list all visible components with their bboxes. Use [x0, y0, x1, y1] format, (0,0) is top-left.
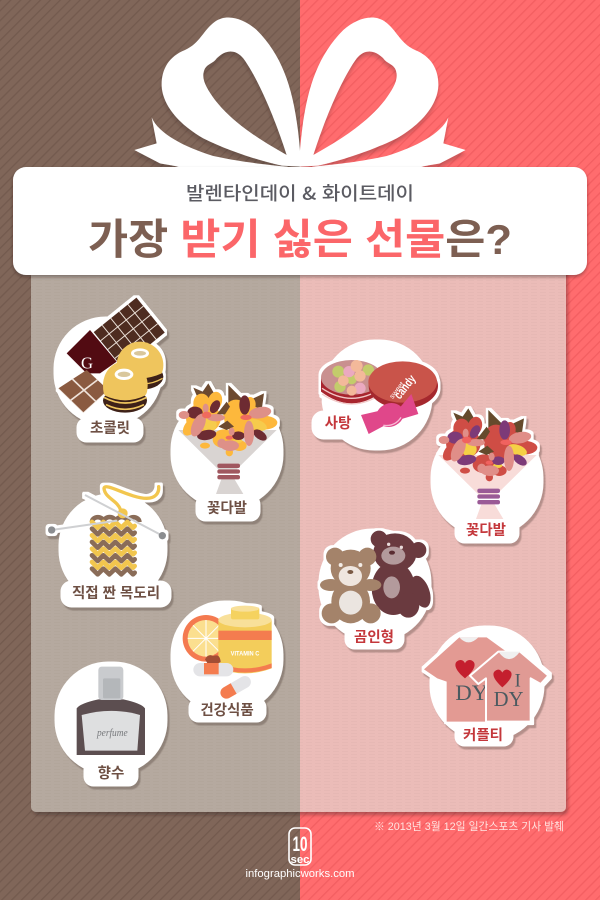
icon: front t-shirt: I [515, 671, 521, 692]
label: 곰인형 [354, 629, 394, 646]
icon: chocolate bar [94, 298, 165, 367]
label: 초콜릿 [90, 420, 130, 437]
icon: bouquet [178, 383, 277, 494]
subtitle: 발렌타인데이 & 화이트데이 [186, 180, 414, 206]
panel: gift box body [31, 265, 566, 812]
icon: knitting [92, 517, 139, 574]
sticker: perfume: perfume [96, 728, 128, 739]
icon: needles [48, 495, 166, 539]
background: red half [300, 0, 600, 900]
label: 꽃다발 [207, 500, 247, 517]
icon: round candy front [103, 361, 148, 413]
icon: yarn [104, 487, 159, 510]
label: 향수 [98, 765, 124, 782]
icon: chocolate piece [58, 370, 108, 413]
icon: wrapped candy [361, 394, 418, 434]
icon: front t-shirt [470, 652, 548, 722]
icon: dark bear [371, 531, 435, 618]
logo: 10 sec: sec [290, 854, 310, 866]
icon: tin lid: candy [391, 372, 419, 402]
left loop [134, 18, 301, 170]
icon: round candy back [117, 342, 163, 389]
icon: bouquet [438, 408, 537, 519]
sticker: knitted scarf [48, 487, 169, 605]
sticker: perfume [57, 664, 165, 784]
logo: 10 sec [289, 828, 311, 866]
right loop [299, 18, 466, 170]
sticker: bouquet 2 [433, 408, 541, 541]
sticker: candy [314, 342, 438, 448]
icon: capsules [193, 655, 253, 701]
title: 가장 받기 싫은 선물은? [88, 216, 512, 263]
icon: tin lid: sweet [387, 380, 406, 400]
icon: orange slice [183, 615, 229, 662]
website: infographicworks.com [246, 868, 354, 880]
header banner [13, 167, 587, 275]
icon: chocolate wrapper [67, 330, 117, 373]
label: 직접 짠 목도리 [72, 585, 160, 602]
background: brown half [0, 0, 300, 900]
logo: 10 sec: 10 [292, 833, 308, 856]
icon: light bear [320, 548, 381, 623]
sticker: teddy bears [320, 531, 435, 647]
label: 사탕 [325, 415, 351, 432]
label: 꽃다발 [466, 522, 506, 539]
label: 커플티 [463, 727, 503, 744]
icon: perfume bottle [77, 699, 145, 755]
sticker: bouquet [173, 383, 281, 519]
ribbon bow [134, 18, 466, 170]
icon: vitamin bottle: VITAMIN C [231, 651, 260, 658]
sticker: couple t-shirts [424, 628, 548, 744]
icon: tin lid [368, 361, 438, 409]
icon: back t-shirt: DY [455, 680, 488, 705]
label: 건강식품 [200, 702, 254, 719]
sticker: chocolate: G [81, 354, 93, 373]
sticker: health food [173, 603, 281, 720]
sticker: chocolate [56, 298, 165, 440]
icon: front t-shirt: DY [494, 689, 524, 711]
icon: candy tin [321, 360, 382, 404]
source note: ※ 2013년 3월 12일 일간스포츠 기사 발췌 [374, 819, 564, 833]
